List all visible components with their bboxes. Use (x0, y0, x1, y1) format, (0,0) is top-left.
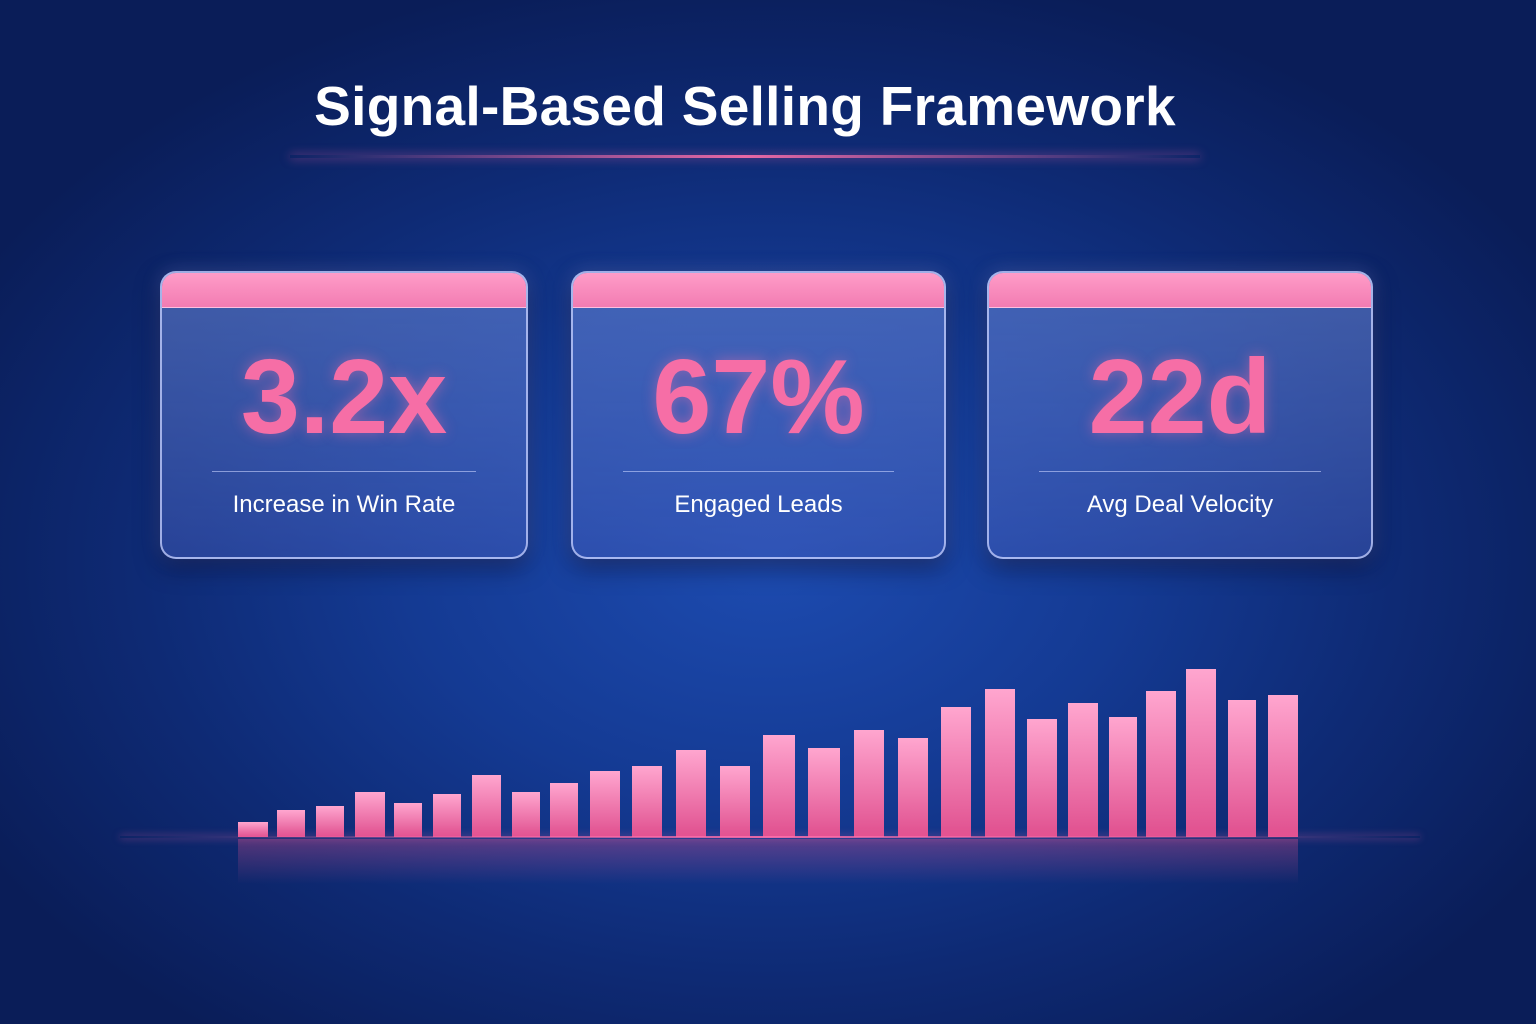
card: deal velocity (987, 271, 1373, 559)
stat: 3.2x: 3.2x (241, 338, 447, 456)
title: Signal-Based Selling Framework (314, 75, 1176, 137)
label: engaged leads: Engaged Leads (674, 491, 843, 518)
label: win rate: Increase in Win Rate (233, 491, 455, 518)
label: deal velocity: Avg Deal Velocity (1087, 491, 1273, 518)
stat: 22d: 22d (1089, 338, 1271, 456)
card: engaged leads (571, 271, 946, 559)
card: win rate (160, 271, 528, 559)
stat: 67%: 67% (652, 338, 865, 456)
